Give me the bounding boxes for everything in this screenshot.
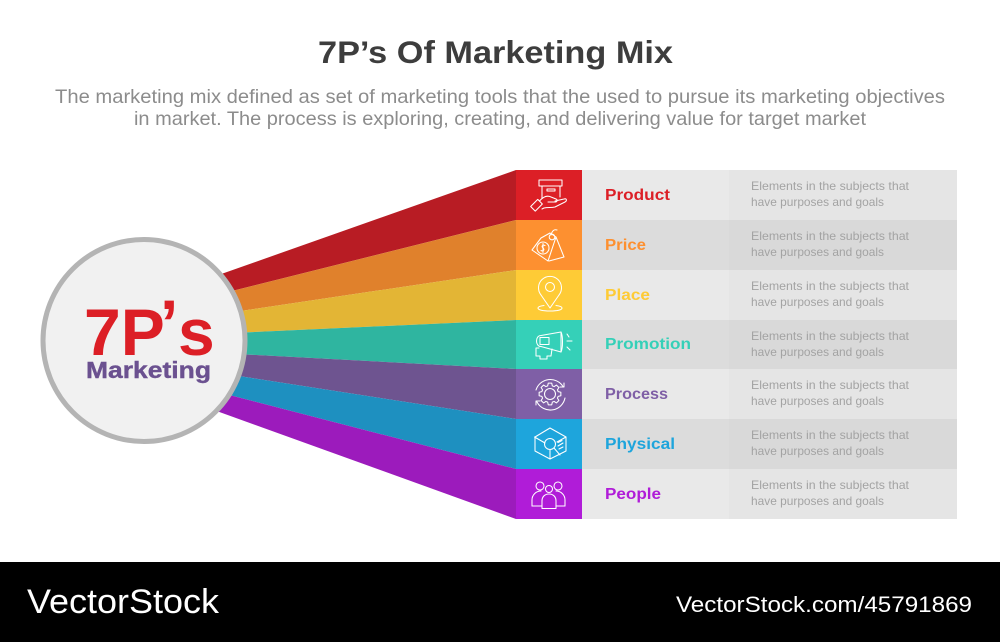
footer bar: VectorStock [27,583,220,621]
row descriptions: have purposes and goals [751,295,884,309]
row labels: Product [605,187,671,204]
row descriptions: Elements in the subjects that [751,179,910,193]
coloured icon blocks [516,170,582,519]
footer bar [0,562,1000,642]
footer bar: VectorStock.com/45791869 [676,592,972,617]
row descriptions: Elements in the subjects that [751,229,910,243]
icon: price tags [532,230,564,261]
central circle [43,240,245,442]
row descriptions: have purposes and goals [751,494,884,508]
row descriptions: have purposes and goals [751,195,884,209]
subtitle: in market. The process is exploring, creating, and delivering value for target market [134,108,867,130]
row labels: Place [605,287,650,304]
row descriptions: Elements in the subjects that [751,378,910,392]
subtitle: The marketing mix defined as set of marketing tools that the used to pursue its marketing objectives [55,86,945,108]
central circle: ’ [160,286,178,360]
icon: megaphone [536,332,572,359]
row descriptions: Elements in the subjects that [751,428,910,442]
row labels: Promotion [605,336,691,353]
icon: process gear [536,379,565,410]
row labels [605,187,691,503]
row descriptions [751,179,910,508]
subtitle [55,86,945,130]
icon: location pin [538,276,562,311]
icon: people [532,482,565,508]
row descriptions: have purposes and goals [751,444,884,458]
row descriptions: have purposes and goals [751,345,884,359]
row labels: Physical [605,436,675,453]
row descriptions: have purposes and goals [751,394,884,408]
row backgrounds [582,170,957,519]
central circle: s [178,295,215,369]
central circle: Marketing [86,357,211,383]
row descriptions: Elements in the subjects that [751,329,910,343]
icon: box in hand [531,180,566,211]
row descriptions: have purposes and goals [751,245,884,259]
title: 7P’s Of Marketing Mix [318,34,674,70]
row labels: Price [605,237,646,254]
fan of perspective bands [200,170,516,519]
row labels: People [605,486,661,503]
row descriptions: Elements in the subjects that [751,478,910,492]
icon: box with magnifier [534,428,566,459]
central circle: 7P [84,295,165,369]
row descriptions: Elements in the subjects that [751,279,910,293]
row labels: Process [605,386,668,403]
